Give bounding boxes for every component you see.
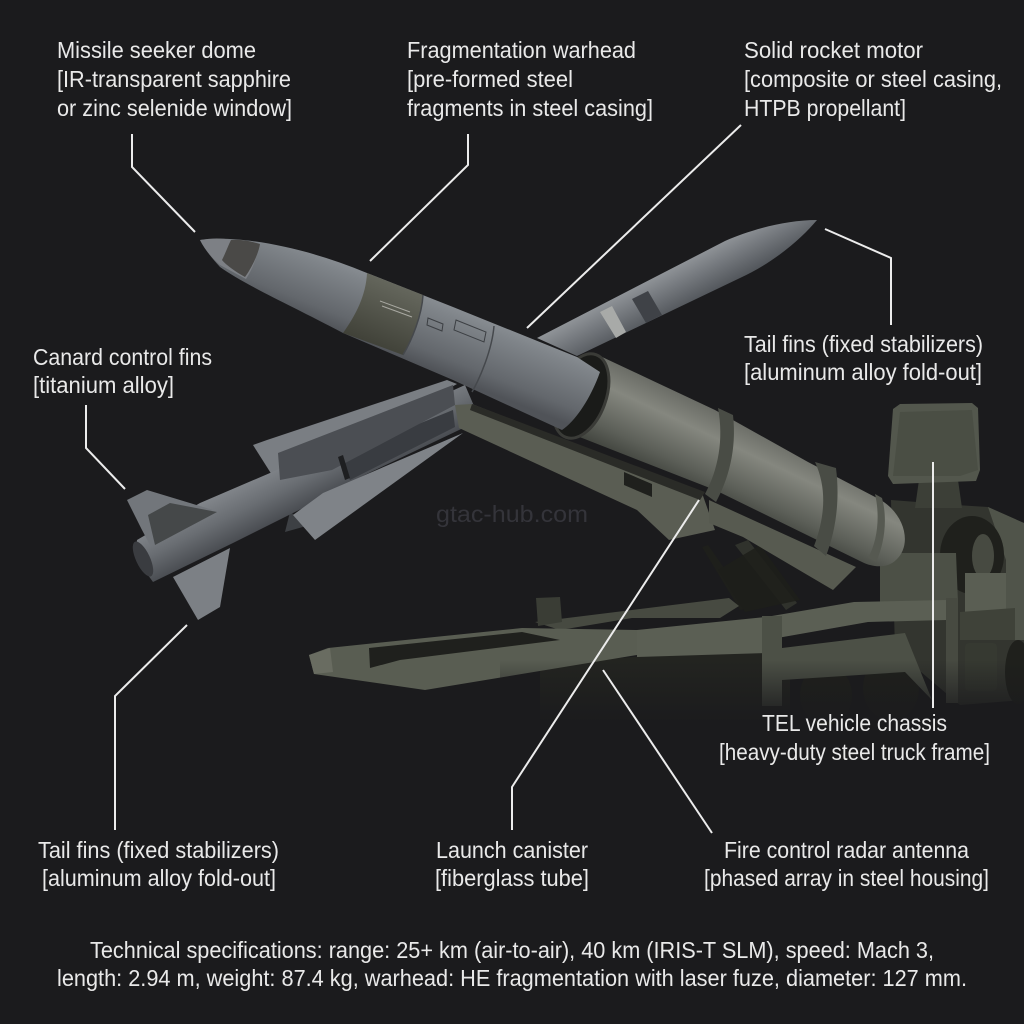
hydraulic struts bbox=[702, 545, 752, 610]
callout: fragmentation warhead: [pre-formed steel bbox=[407, 66, 573, 92]
radar antenna bbox=[888, 403, 980, 508]
road wheels bbox=[800, 665, 852, 725]
callout: canard control fins: [titanium alloy] bbox=[33, 372, 174, 398]
TEL truck and launcher base bbox=[309, 500, 1024, 725]
rail slot bbox=[624, 472, 652, 497]
callout: missile seeker dome: Missile seeker dome bbox=[57, 37, 256, 63]
frame lug bbox=[536, 597, 562, 626]
callout: tail fins right: [aluminum alloy fold-out] bbox=[744, 359, 982, 385]
fuel tank bbox=[965, 643, 997, 691]
section seams bbox=[403, 295, 494, 392]
tail fin dark bbox=[148, 503, 217, 545]
callout: fire control radar antenna: [phased array in steel housing] bbox=[704, 865, 989, 891]
callout: TEL vehicle chassis bbox=[719, 462, 990, 765]
launch canister bbox=[455, 346, 905, 590]
frame near rail bbox=[309, 628, 637, 690]
callout: solid rocket motor: HTPB propellant] bbox=[744, 95, 906, 121]
clamp band two bbox=[814, 462, 838, 556]
callout: tail fins right bbox=[744, 229, 983, 385]
callout: tail fins left bbox=[38, 625, 279, 891]
step deck bbox=[782, 633, 932, 700]
callout: fragmentation warhead bbox=[370, 37, 653, 261]
callout: missile seeker dome bbox=[57, 37, 292, 232]
rail top strip bbox=[470, 404, 705, 500]
frame far rail bbox=[535, 598, 739, 630]
under-frame dark machinery bbox=[540, 645, 790, 720]
spare wheel bbox=[940, 516, 1004, 594]
callout: launch canister: [fiberglass tube] bbox=[435, 865, 589, 891]
missile body bbox=[200, 239, 600, 430]
canister tube bbox=[577, 356, 905, 566]
callout: tail fins right: Tail fins (fixed stabilizers) bbox=[744, 331, 983, 357]
canister mouth ring bbox=[542, 346, 620, 446]
side rail bbox=[337, 410, 455, 480]
end cap of frame bbox=[309, 648, 333, 674]
body rear bbox=[135, 385, 480, 582]
tail fin lower bbox=[173, 548, 230, 620]
callout: solid rocket motor: Solid rocket motor bbox=[744, 37, 923, 63]
forward body band bbox=[600, 306, 626, 338]
callout: solid rocket motor: [composite or steel casing, bbox=[744, 66, 1002, 92]
technical specifications: Technical specifications: range: 25+ km (air-to-air), 40 km (IRIS-T SLM), speed: Mach 3, bbox=[90, 937, 934, 963]
warhead section bbox=[343, 273, 423, 355]
technical specifications: length: 2.94 m, weight: 87.4 kg, warhead: HE fragmentation with laser fuze, diameter: 127 mm. bbox=[57, 965, 967, 991]
end band bbox=[868, 494, 885, 562]
joint ring bbox=[338, 455, 350, 480]
callout: fragmentation warhead: fragments in steel casing] bbox=[407, 95, 653, 121]
equipment section panels bbox=[427, 318, 486, 342]
cab panel bbox=[988, 507, 1024, 640]
seeker dome bbox=[200, 238, 259, 279]
strake face bbox=[278, 385, 455, 480]
launcher rail upper bbox=[455, 404, 715, 540]
radar mount bbox=[915, 480, 962, 508]
callout: fire control radar antenna: Fire control radar antenna bbox=[724, 837, 969, 863]
callout: TEL vehicle chassis: TEL vehicle chassis bbox=[762, 710, 947, 736]
forward body bbox=[537, 220, 817, 356]
watermark: gtac-hub.com bbox=[436, 501, 588, 527]
equipment block bbox=[880, 553, 958, 605]
rear upper wing bbox=[253, 380, 457, 480]
callout: launch canister bbox=[435, 500, 699, 891]
callout: TEL vehicle chassis: [heavy-duty steel truck frame] bbox=[719, 739, 990, 765]
technical specifications bbox=[57, 937, 967, 991]
callout: fire control radar antenna bbox=[603, 670, 989, 891]
rear lower fin shadow bbox=[285, 512, 310, 532]
warhead stencil bbox=[380, 301, 412, 317]
callout: canard control fins bbox=[33, 344, 212, 489]
lower wing bbox=[293, 433, 463, 540]
lower missile bbox=[127, 220, 817, 620]
callout: fragmentation warhead: Fragmentation warhead bbox=[407, 37, 636, 63]
callout: solid rocket motor bbox=[527, 37, 1002, 328]
callout: launch canister: Launch canister bbox=[436, 837, 588, 863]
clamp band one bbox=[705, 408, 734, 502]
frame hole bbox=[369, 632, 560, 668]
truck rear body bbox=[891, 500, 1024, 705]
bottom fade bbox=[500, 660, 1024, 722]
callout: missile seeker dome: or zinc selenide window] bbox=[57, 95, 292, 121]
nozzle bbox=[129, 539, 157, 579]
callout: tail fins left: [aluminum alloy fold-out] bbox=[42, 865, 276, 891]
callout: tail fins left: Tail fins (fixed stabilizers) bbox=[38, 837, 279, 863]
callout: canard control fins: Canard control fins bbox=[33, 344, 212, 370]
callout: missile seeker dome: [IR-transparent sapphire bbox=[57, 66, 291, 92]
main beam bbox=[637, 600, 946, 657]
tail fin upper bbox=[127, 490, 213, 545]
upper missile bbox=[200, 238, 600, 430]
radar panel bbox=[888, 403, 980, 484]
launcher rail lower bbox=[709, 500, 856, 590]
vertical post bbox=[762, 616, 782, 706]
